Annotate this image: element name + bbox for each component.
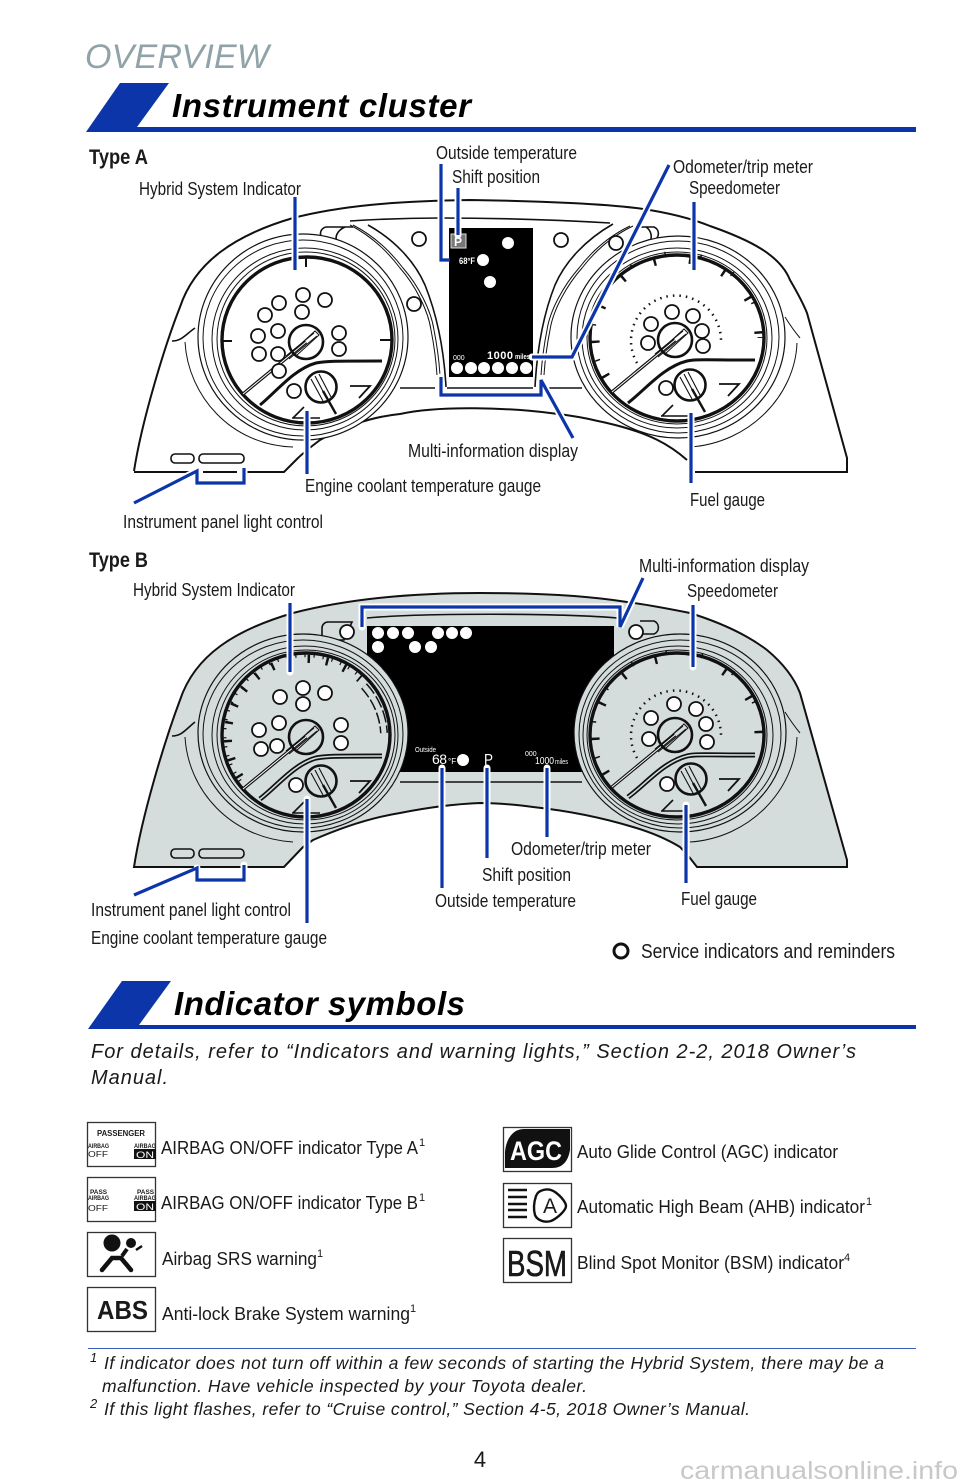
callout: Odometer/trip meter: Odometer/trip meter bbox=[511, 838, 651, 859]
footnotes: 2 bbox=[89, 1396, 98, 1411]
display: Type B multi-information display: 000 bbox=[525, 751, 537, 758]
indicator: AIRBAG ON/OFF Type A: AIRBAG ON/OFF indicator Type A bbox=[161, 1137, 419, 1158]
display: Type A multi-information display: P bbox=[454, 235, 462, 249]
icon: AHB: A bbox=[543, 1195, 557, 1218]
label: Type A: Type A bbox=[89, 146, 148, 169]
callout: Hybrid System Indicator: Hybrid System Indicator bbox=[139, 178, 301, 199]
callout: Fuel gauge: Fuel gauge bbox=[681, 888, 757, 909]
callout: Odometer/trip meter bbox=[532, 156, 813, 357]
icon: passenger airbag type A: AIRBAG bbox=[134, 1143, 156, 1150]
indicator: Airbag SRS warning: Airbag SRS warning bbox=[162, 1248, 317, 1269]
indicator: ABS warning: 1 bbox=[410, 1303, 416, 1315]
heading: Instrument cluster: Instrument cluster bbox=[172, 87, 473, 124]
indicator: Automatic High Beam: 1 bbox=[866, 1196, 872, 1208]
indicator: AIRBAG ON/OFF Type A: 1 bbox=[419, 1137, 425, 1149]
icon: passenger airbag type A: ON bbox=[136, 1150, 154, 1160]
display: Type B multi-information display: Outside bbox=[415, 747, 436, 754]
diagram: Type A housing bbox=[134, 200, 847, 472]
icon: passenger airbag type B: PASS bbox=[90, 1189, 108, 1196]
icon: passenger airbag type A bbox=[88, 1122, 156, 1166]
indicator: AIRBAG ON/OFF Type B: 1 bbox=[419, 1192, 425, 1204]
icon: passenger airbag type A: AIRBAG bbox=[88, 1143, 109, 1150]
icon: ABS bbox=[88, 1288, 156, 1332]
callout: Instrument panel light control bbox=[123, 468, 323, 532]
icon: passenger airbag type B bbox=[88, 1178, 156, 1222]
icon: BSM: BSM bbox=[507, 1243, 567, 1284]
callout: Instrument panel light control bbox=[91, 865, 291, 920]
heading: Indicator symbols bbox=[88, 981, 916, 1029]
service indicators: Type B housing bbox=[340, 625, 643, 639]
icon: passenger airbag type B: ON bbox=[136, 1202, 154, 1212]
icon: passenger airbag type A: PASSENGER bbox=[97, 1129, 145, 1138]
heading: Indicator symbols: Indicator symbols bbox=[174, 985, 465, 1022]
callout: Shift position bbox=[452, 166, 540, 235]
intro text: For details, refer to “Indicators and warning lights,” Section 2-2, 2018 Owner’s bbox=[91, 1041, 856, 1063]
indicator: Auto Glide Control: Auto Glide Control (AGC) indicator bbox=[577, 1141, 838, 1162]
callout: Speedometer bbox=[689, 177, 780, 270]
indicator: ABS warning bbox=[88, 1288, 416, 1332]
indicator: Airbag SRS warning bbox=[88, 1232, 323, 1276]
panel: Type B cluster bbox=[89, 549, 847, 948]
callout: Outside temperature bbox=[436, 142, 577, 260]
callout: Outside temperature: Outside temperature bbox=[436, 142, 577, 163]
callout: Hybrid System Indicator: Hybrid System Indicator bbox=[133, 579, 295, 600]
label: Type B: Type B bbox=[89, 549, 148, 572]
display: Type B multi-information display: 1000 bbox=[535, 756, 554, 767]
icon: AGC: AGC bbox=[510, 1136, 562, 1166]
display: Type B multi-information display: 68 bbox=[432, 751, 447, 767]
indicator: Automatic High Beam: Automatic High Beam (AHB) indicator bbox=[577, 1196, 865, 1217]
callout: Outside temperature: Outside temperature bbox=[435, 890, 576, 911]
icon: passenger airbag type B: PASS bbox=[137, 1189, 155, 1196]
callout: Engine coolant temperature gauge: Engine coolant temperature gauge bbox=[305, 475, 541, 496]
page number: 4 bbox=[474, 1447, 486, 1472]
callout: Multi-information display bbox=[362, 555, 810, 627]
gauge: Type B hybrid system indicator bbox=[198, 634, 408, 832]
footnotes: If indicator does not turn off within a few seconds of starting the Hybrid System, there may be a bbox=[104, 1353, 884, 1373]
icon: ABS: ABS bbox=[97, 1295, 148, 1325]
callout: Speedometer bbox=[687, 580, 778, 667]
icon: AGC bbox=[504, 1128, 572, 1172]
callout: Odometer/trip meter bbox=[511, 768, 651, 859]
footnotes: 1 bbox=[90, 1350, 97, 1365]
indicator: Automatic High Beam bbox=[504, 1184, 872, 1228]
display: Type A multi-information display: 000 bbox=[453, 355, 465, 362]
callout: Shift position: Shift position bbox=[452, 166, 540, 187]
callout: Speedometer: Speedometer bbox=[687, 580, 778, 601]
display: Type A multi-information display: miles bbox=[515, 354, 530, 361]
indicator: AIRBAG ON/OFF Type B bbox=[88, 1178, 425, 1222]
callout: Shift position bbox=[482, 768, 571, 885]
indicator: Blind Spot Monitor: Blind Spot Monitor (BSM) indicator bbox=[577, 1252, 844, 1273]
callout: Speedometer: Speedometer bbox=[689, 177, 780, 198]
service indicators: Type A housing bbox=[407, 232, 623, 311]
legend: service indicators: Service indicators and reminders bbox=[641, 941, 895, 963]
display: Type B multi-information display: P bbox=[484, 752, 493, 769]
display: Type A multi-information display bbox=[449, 228, 533, 377]
indicator: ABS warning: Anti-lock Brake System warning bbox=[162, 1303, 410, 1324]
indicator: Airbag SRS warning: 1 bbox=[317, 1248, 323, 1260]
footnotes bbox=[89, 1350, 884, 1419]
icon: airbag SRS bbox=[88, 1232, 156, 1276]
heading: Instrument cluster bbox=[86, 83, 916, 132]
diagram: Type B housing bbox=[134, 593, 847, 867]
indicator: Blind Spot Monitor: 4 bbox=[844, 1252, 850, 1264]
indicator: AIRBAG ON/OFF Type A bbox=[88, 1122, 425, 1166]
intro text bbox=[91, 1041, 856, 1089]
section label: OVERVIEW: OVERVIEW bbox=[85, 38, 272, 76]
callout: Multi-information display bbox=[408, 377, 579, 461]
display: Type B multi-information display: miles bbox=[555, 759, 568, 766]
indicator: Blind Spot Monitor bbox=[504, 1238, 850, 1284]
callout: Shift position: Shift position bbox=[482, 864, 571, 885]
callout: Instrument panel light control: Instrument panel light control bbox=[91, 899, 291, 920]
callout: Engine coolant temperature gauge: Engine coolant temperature gauge bbox=[91, 927, 327, 948]
callout: Fuel gauge bbox=[690, 413, 765, 510]
gauge: Type A hybrid system indicator bbox=[198, 234, 408, 440]
intro text: Manual. bbox=[91, 1067, 168, 1089]
display: Type A multi-information display: 1000 bbox=[487, 350, 513, 362]
callout: Fuel gauge: Fuel gauge bbox=[690, 489, 765, 510]
icon: passenger airbag type A: OFF bbox=[88, 1149, 108, 1159]
icon: passenger airbag type B: AIRBAG bbox=[134, 1195, 156, 1202]
indicator: AIRBAG ON/OFF Type B: AIRBAG ON/OFF indicator Type B bbox=[161, 1192, 418, 1213]
display: Type B multi-information display: °F bbox=[448, 757, 456, 766]
gauge: Type B speedometer bbox=[574, 634, 786, 832]
panel: Type A cluster bbox=[89, 142, 847, 532]
indicator: Auto Glide Control bbox=[504, 1128, 838, 1172]
callout: Odometer/trip meter: Odometer/trip meter bbox=[673, 156, 813, 177]
callout: Instrument panel light control: Instrument panel light control bbox=[123, 511, 323, 532]
icon: passenger airbag type B: AIRBAG bbox=[88, 1195, 109, 1202]
icon: AHB bbox=[504, 1184, 572, 1228]
callout: Fuel gauge bbox=[681, 805, 757, 909]
display: Type B multi-information display bbox=[367, 626, 614, 772]
callout: Multi-information display: Multi-information display bbox=[639, 555, 810, 576]
callout: Multi-information display: Multi-information display bbox=[408, 440, 579, 461]
icon: passenger airbag type B: OFF bbox=[88, 1203, 108, 1213]
display: Type A multi-information display: 68°F bbox=[459, 256, 475, 266]
gauge: Type A speedometer bbox=[571, 236, 785, 438]
footnotes: If this light flashes, refer to “Cruise control,” Section 4-5, 2018 Owner’s Manual. bbox=[104, 1399, 750, 1419]
footnotes: malfunction. Have vehicle inspected by your Toyota dealer. bbox=[102, 1376, 587, 1396]
